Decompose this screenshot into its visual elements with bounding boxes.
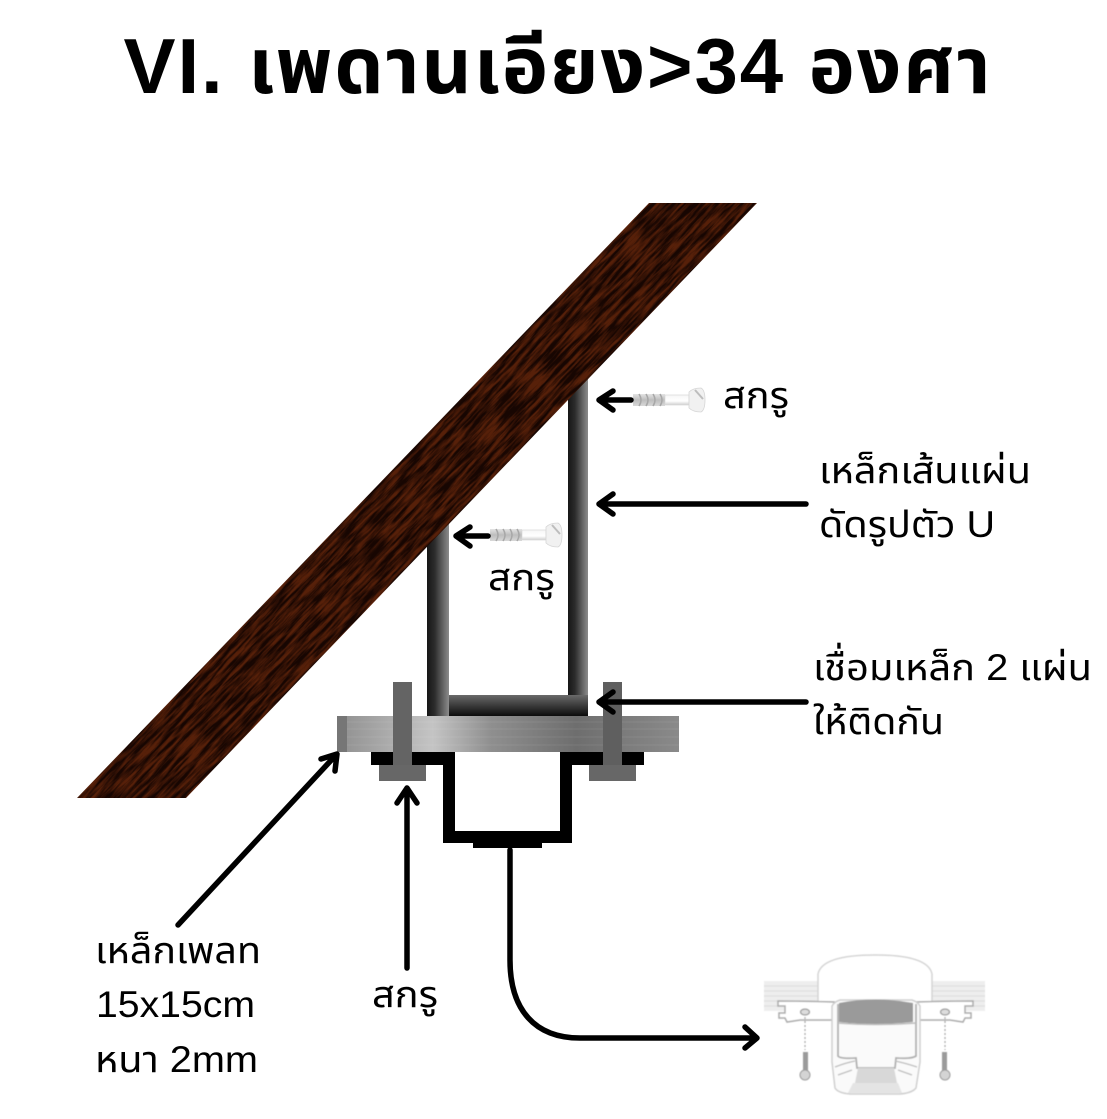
label: U strip: ดัดรูปตัว U: [819, 504, 995, 547]
sloped wooden ceiling beam: [77, 203, 757, 798]
lower screw: [490, 523, 562, 547]
label: U strip: เหล็กเส้นแผ่น: [819, 450, 1031, 491]
black hat channel bracket: [371, 752, 644, 848]
steel U strip: left post: [427, 505, 449, 716]
label: weld two plates: เชื่อมเหล็ก 2 แผ่น: [813, 642, 1092, 688]
label: steel plate spec: เหล็กเพลท: [95, 930, 261, 971]
label: weld two plates: [813, 642, 1092, 742]
steel base plate: [337, 716, 679, 752]
upper screw: [633, 388, 705, 412]
left anchor bolt: [379, 682, 426, 781]
label: U strip: [819, 450, 1031, 547]
arrow: U strip: [599, 494, 806, 514]
label: steel plate spec: หนา 2mm: [95, 1039, 258, 1080]
right anchor bolt: [589, 682, 636, 781]
steel U strip: right post: [568, 370, 588, 696]
label: steel plate spec: 15x15cm: [96, 984, 255, 1025]
arrow: lower drill hole: [456, 527, 488, 546]
label: bottom drill hole: สกรู: [372, 974, 438, 1017]
arrow: weld: [599, 692, 806, 712]
label: steel plate spec: [95, 930, 261, 1080]
arrow: curved to ceiling mount: [510, 850, 757, 1048]
steel U strip: welded cross bar: [449, 695, 588, 716]
arrow: bottom drill hole: [397, 788, 417, 968]
label: weld two plates: ให้ติดกัน: [813, 701, 944, 742]
title: VI. เพดานเอียง>34 องศา: [124, 22, 990, 110]
arrow: base plate: [178, 754, 337, 925]
icon: ceiling light mount: [764, 955, 985, 1094]
label: lower drill hole: สกรู: [488, 557, 555, 600]
arrow: upper drill hole: [599, 391, 631, 410]
label: upper drill hole: สกรู: [723, 375, 789, 418]
